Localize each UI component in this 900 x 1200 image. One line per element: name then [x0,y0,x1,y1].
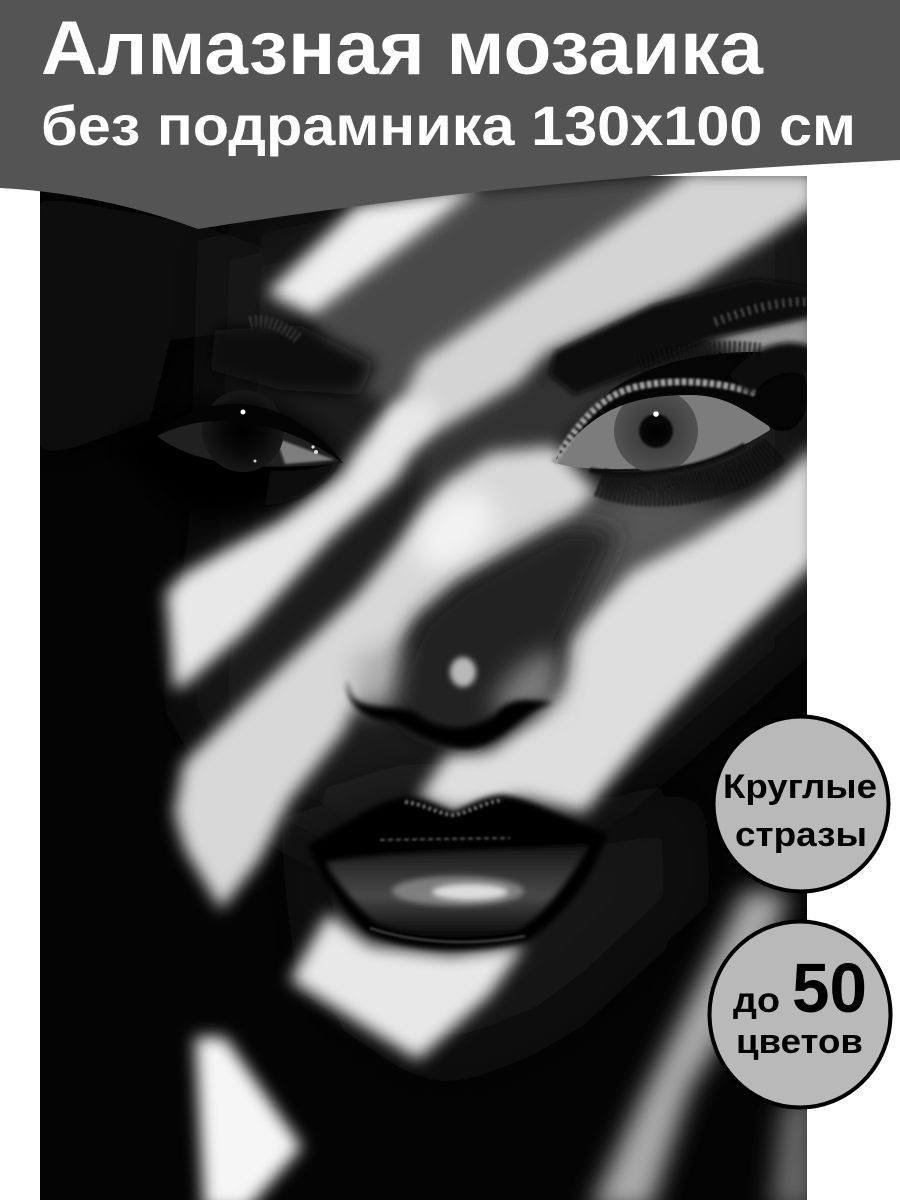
upper face shade [191,210,807,831]
badge: up to 50 colours: до [733,981,780,1020]
header banner [0,0,900,229]
light shape: bottom left [195,1037,302,1200]
badge: round rhinestones: Круглые [723,768,877,806]
nose [347,523,620,748]
lips [307,795,607,950]
light stripe: central left cheek [166,400,440,688]
light stripe: forehead to temple [380,172,815,443]
left eye [110,390,343,524]
under right eye shade [556,484,737,630]
badge: up to 50 colours [710,922,890,1108]
right eye skin tone [705,314,807,354]
badge: up to 50 colours: цветов [736,1023,863,1061]
title: Алмазная мозаика [41,6,764,91]
light stripe: nose bridge to left cheek [174,445,597,910]
light stripe: upper forehead [267,186,480,316]
left eyebrow [210,321,375,395]
bright spot on nose bridge [399,478,498,575]
badge: round rhinestones [714,716,888,892]
forehead mid-tone band [313,172,690,403]
dark band near left of the right eye [418,374,624,502]
lower face shade [300,780,690,1070]
badge: up to 50 colours: 50 [792,949,867,1027]
right eye [554,348,815,492]
hair, top left [40,201,188,450]
light stripe: chin [290,913,525,1060]
badge: round rhinestones: стразы [735,816,867,854]
subtitle: без подрамника 130х100 см [41,94,856,157]
right eyebrow [550,279,815,395]
light stripe: right cheek [418,445,815,813]
photo: woman's face with diagonal light stripes [40,172,815,1200]
light stripe: bottom right [590,890,790,1200]
